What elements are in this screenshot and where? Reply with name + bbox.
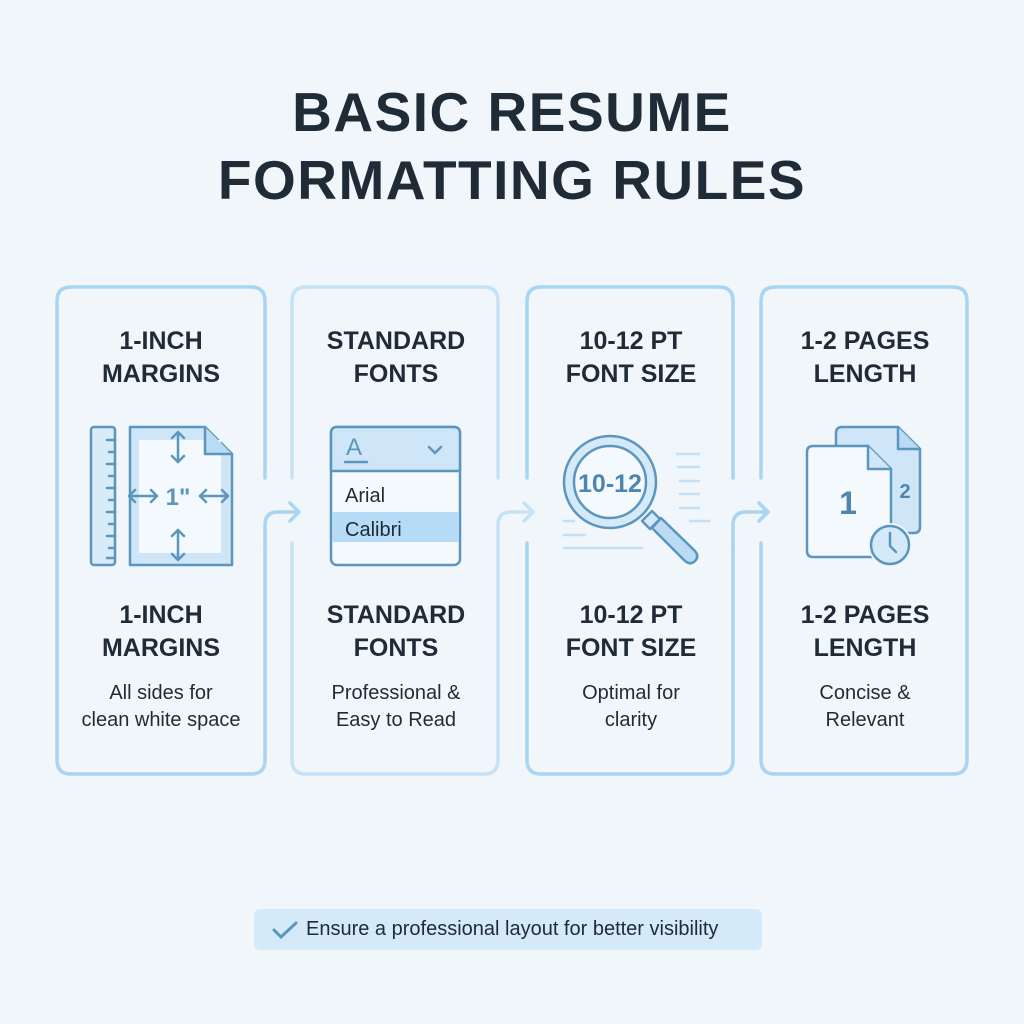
panel: margins border [57,287,265,774]
description: fonts [332,682,460,731]
heading: fonts bottom [327,601,465,662]
heading: length top [801,327,929,388]
title [218,81,806,211]
heading: margins top: MARGINS [102,360,220,388]
panels and connecting arrows: A [346,434,362,461]
description: length: Concise & [819,682,911,704]
panel: length border [761,287,967,774]
heading: margins bottom [102,601,220,662]
description: size [582,682,680,731]
heading: size top [566,327,696,388]
panels and connecting arrows: Calibri [345,519,402,541]
heading: size bottom [566,601,696,662]
heading: size bottom: FONT SIZE [566,634,696,662]
panel: font size border [527,287,733,774]
title: FORMATTING RULES [218,149,806,211]
heading: margins bottom: MARGINS [102,634,220,662]
heading: size bottom: 10-12 PT [580,601,682,629]
heading: fonts top [327,327,465,388]
panels and connecting arrows: 2 [899,481,911,503]
icon: ruler and page with margins [91,427,232,565]
description: size: clarity [605,709,657,731]
panels and connecting arrows: 10-12 [578,470,642,498]
heading: size top: 10-12 PT [580,327,682,355]
arrow 1 [265,503,299,545]
description: length: Relevant [826,709,904,731]
description: length [819,682,911,731]
heading: fonts bottom: FONTS [354,634,438,662]
description: margins: All sides for [109,682,213,704]
icon: magnifier [564,436,709,563]
description: fonts: Professional & [332,682,460,704]
heading: length top: 1-2 PAGES [801,327,929,355]
heading: length bottom: LENGTH [814,634,916,662]
description: margins: clean white space [82,709,240,731]
arrow 3 [733,503,768,545]
heading: fonts bottom: STANDARD [327,601,465,629]
heading: length bottom: 1-2 PAGES [801,601,929,629]
heading: length bottom [801,601,929,662]
heading: length top: LENGTH [814,360,916,388]
footer callout: Ensure a professional layout for better visibility [306,918,718,940]
title: BASIC RESUME [292,81,732,143]
icon text: 1": 1" [166,484,190,511]
description: margins [82,682,240,731]
icon: check [272,921,298,939]
footer callout [254,909,762,950]
heading: fonts top: STANDARD [327,327,465,355]
panel: fonts border [292,287,498,774]
heading: margins top [102,327,220,388]
heading: margins bottom: 1-INCH [119,601,203,629]
panels and connecting arrows: 1 [839,485,857,521]
icon: two pages with clock [807,427,920,567]
arrow 2 [498,503,533,545]
description: fonts: Easy to Read [336,709,456,731]
heading: fonts top: FONTS [354,360,438,388]
description: size: Optimal for [582,682,680,704]
icon: font dropdown [331,427,460,565]
panels and connecting arrows: Arial [345,485,385,507]
heading: margins top: 1-INCH [119,327,203,355]
heading: size top: FONT SIZE [566,360,696,388]
